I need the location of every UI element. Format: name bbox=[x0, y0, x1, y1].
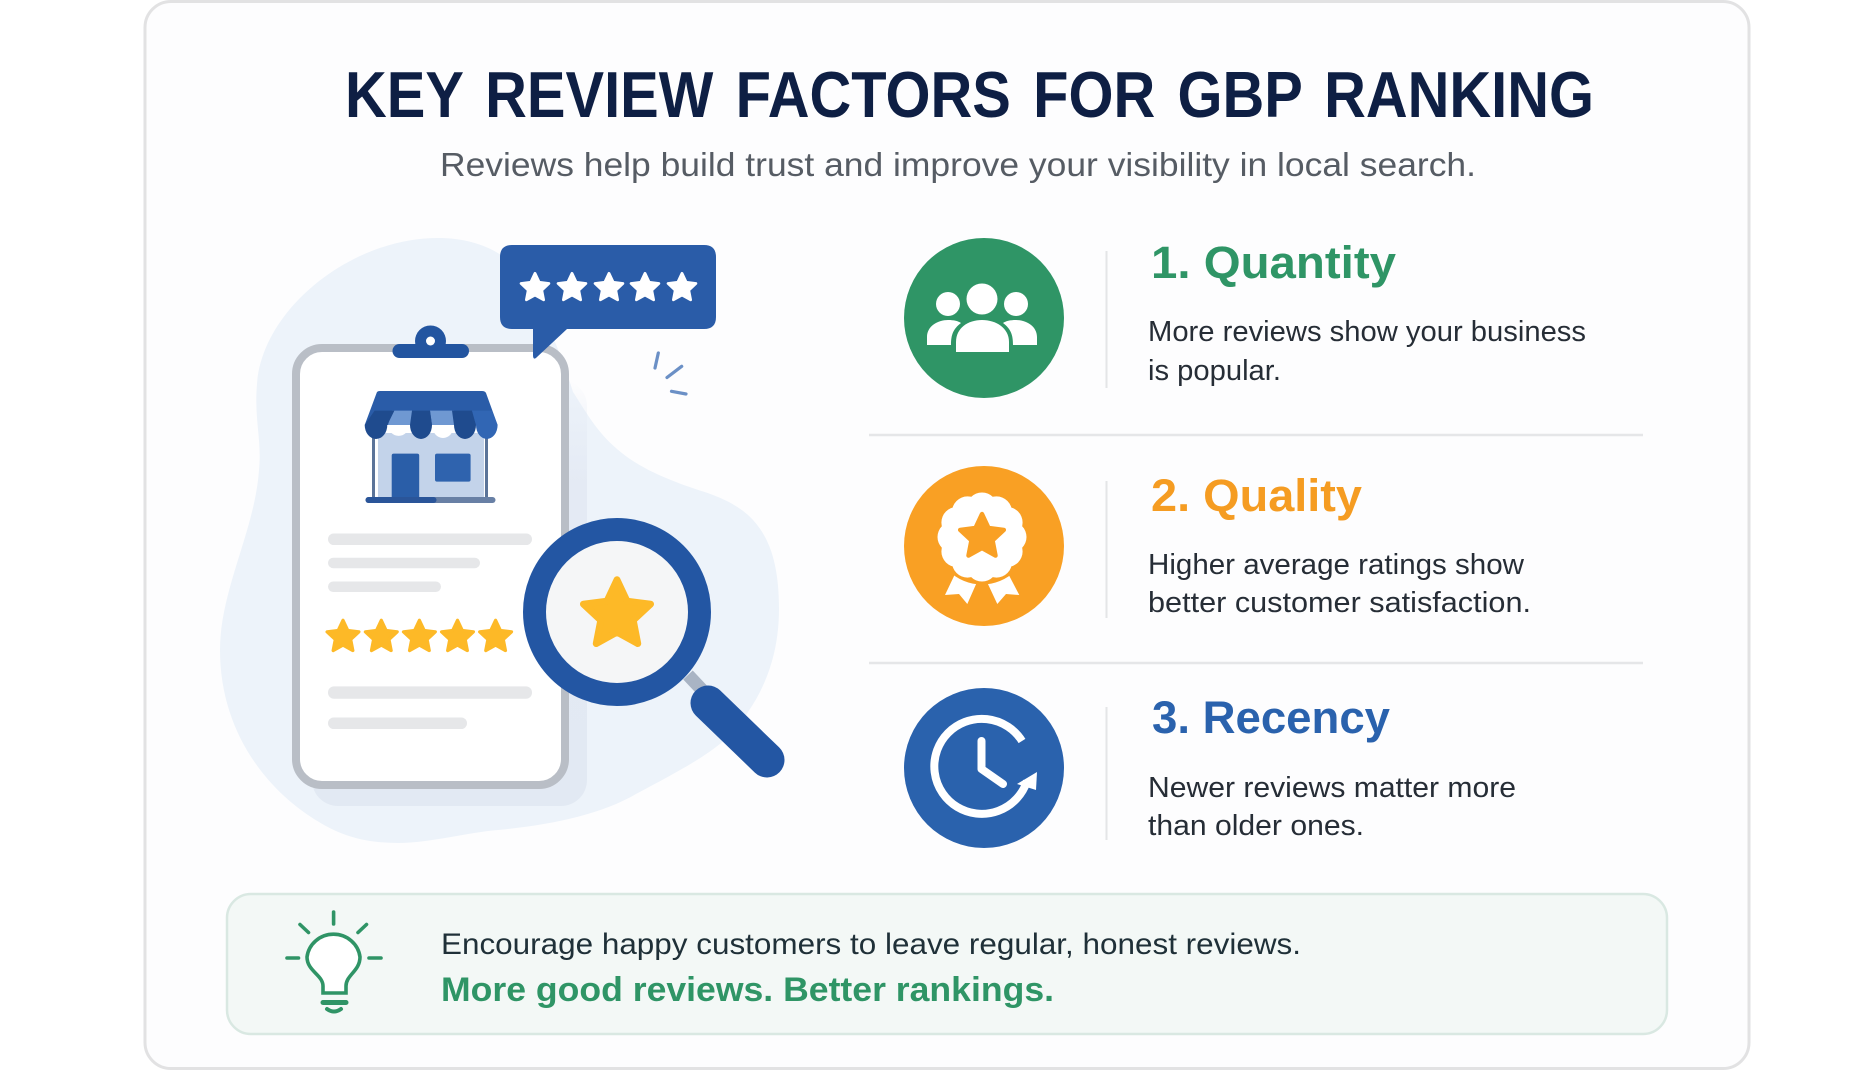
clipboard shadow bbox=[312, 380, 587, 806]
description: quantity: More reviews show your business bbox=[1148, 316, 1586, 348]
icon: clock with arrow bbox=[904, 688, 1064, 848]
heading: quantity: 1. Quantity bbox=[1151, 237, 1396, 288]
magnifying glass bbox=[534, 530, 767, 760]
subtitle: Reviews help build trust and improve your visibility in local search. bbox=[440, 146, 1476, 183]
description: recency: than older ones. bbox=[1148, 810, 1364, 842]
magnified star bbox=[583, 580, 651, 644]
icon: storefront bbox=[365, 391, 498, 503]
clipboard bbox=[296, 326, 565, 785]
icon: award rosette bbox=[904, 466, 1064, 626]
title: KEY REVIEW FACTORS FOR GBP RANKING bbox=[345, 58, 1594, 131]
description: recency: Newer reviews matter more bbox=[1148, 772, 1516, 804]
description: quality: better customer satisfaction. bbox=[1148, 587, 1531, 619]
heading: quality: 2. Quality bbox=[1151, 470, 1362, 521]
speech bubble with stars bbox=[500, 245, 716, 359]
clipboard clip bbox=[392, 326, 469, 358]
callout emphasis: More good reviews. Better rankings. bbox=[441, 971, 1054, 1009]
description: quality: Higher average ratings show bbox=[1148, 549, 1525, 581]
spark marks bbox=[655, 353, 686, 394]
icon: customers bbox=[904, 238, 1064, 398]
text placeholder lines bbox=[328, 534, 532, 729]
background blob bbox=[220, 238, 779, 843]
callout panel bbox=[227, 894, 1667, 1034]
illustration: review clipboard and magnifier bbox=[220, 238, 779, 843]
callout text: Encourage happy customers to leave regular, honest reviews. bbox=[441, 928, 1301, 961]
description: quantity: is popular. bbox=[1148, 355, 1281, 387]
factor 1: quantity bbox=[904, 237, 1586, 398]
icon: light bulb bbox=[287, 912, 381, 1012]
heading: recency: 3. Recency bbox=[1152, 692, 1390, 743]
factor 2: quality bbox=[904, 466, 1531, 626]
five gold stars bbox=[327, 620, 512, 651]
factor 3: recency bbox=[904, 688, 1516, 848]
